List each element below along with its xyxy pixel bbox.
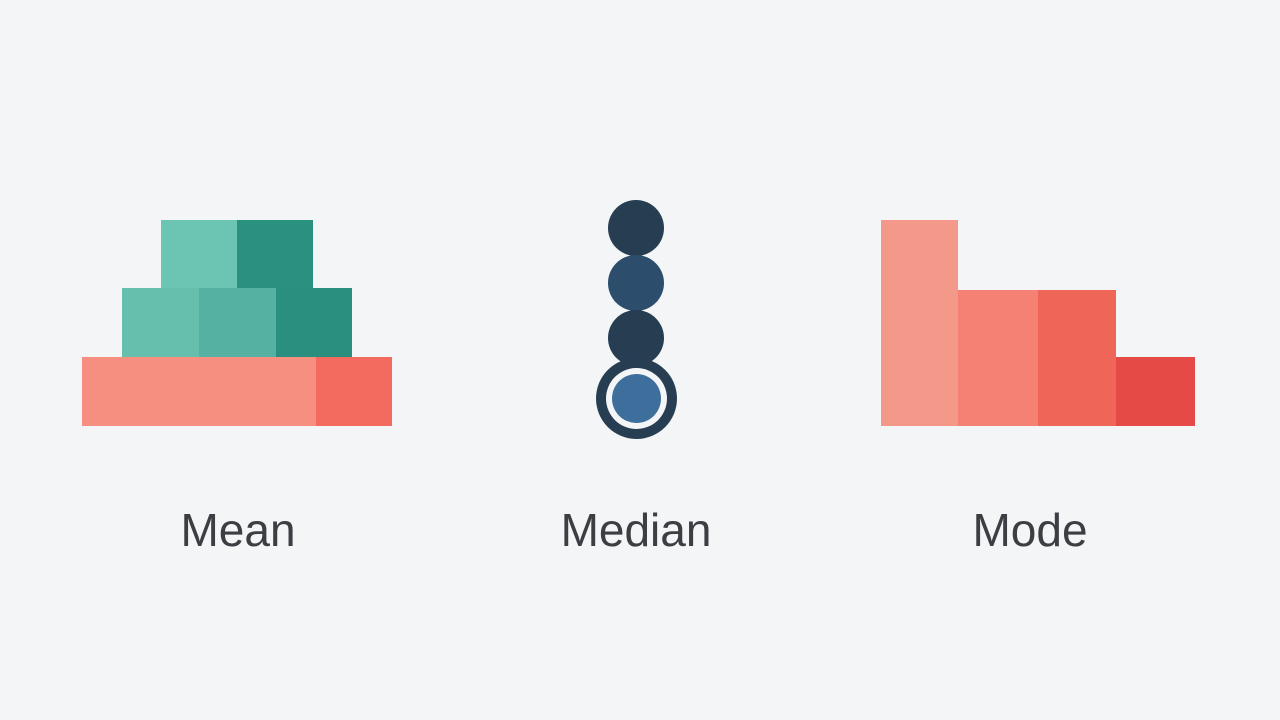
label: Mode: Mode [972, 504, 1088, 556]
label: Mean: Mean [180, 504, 296, 556]
panel: mode bars [881, 220, 1195, 426]
panel: mean blocks [82, 220, 392, 426]
label: Median: Median [561, 504, 711, 556]
panel: median circles [596, 200, 677, 439]
